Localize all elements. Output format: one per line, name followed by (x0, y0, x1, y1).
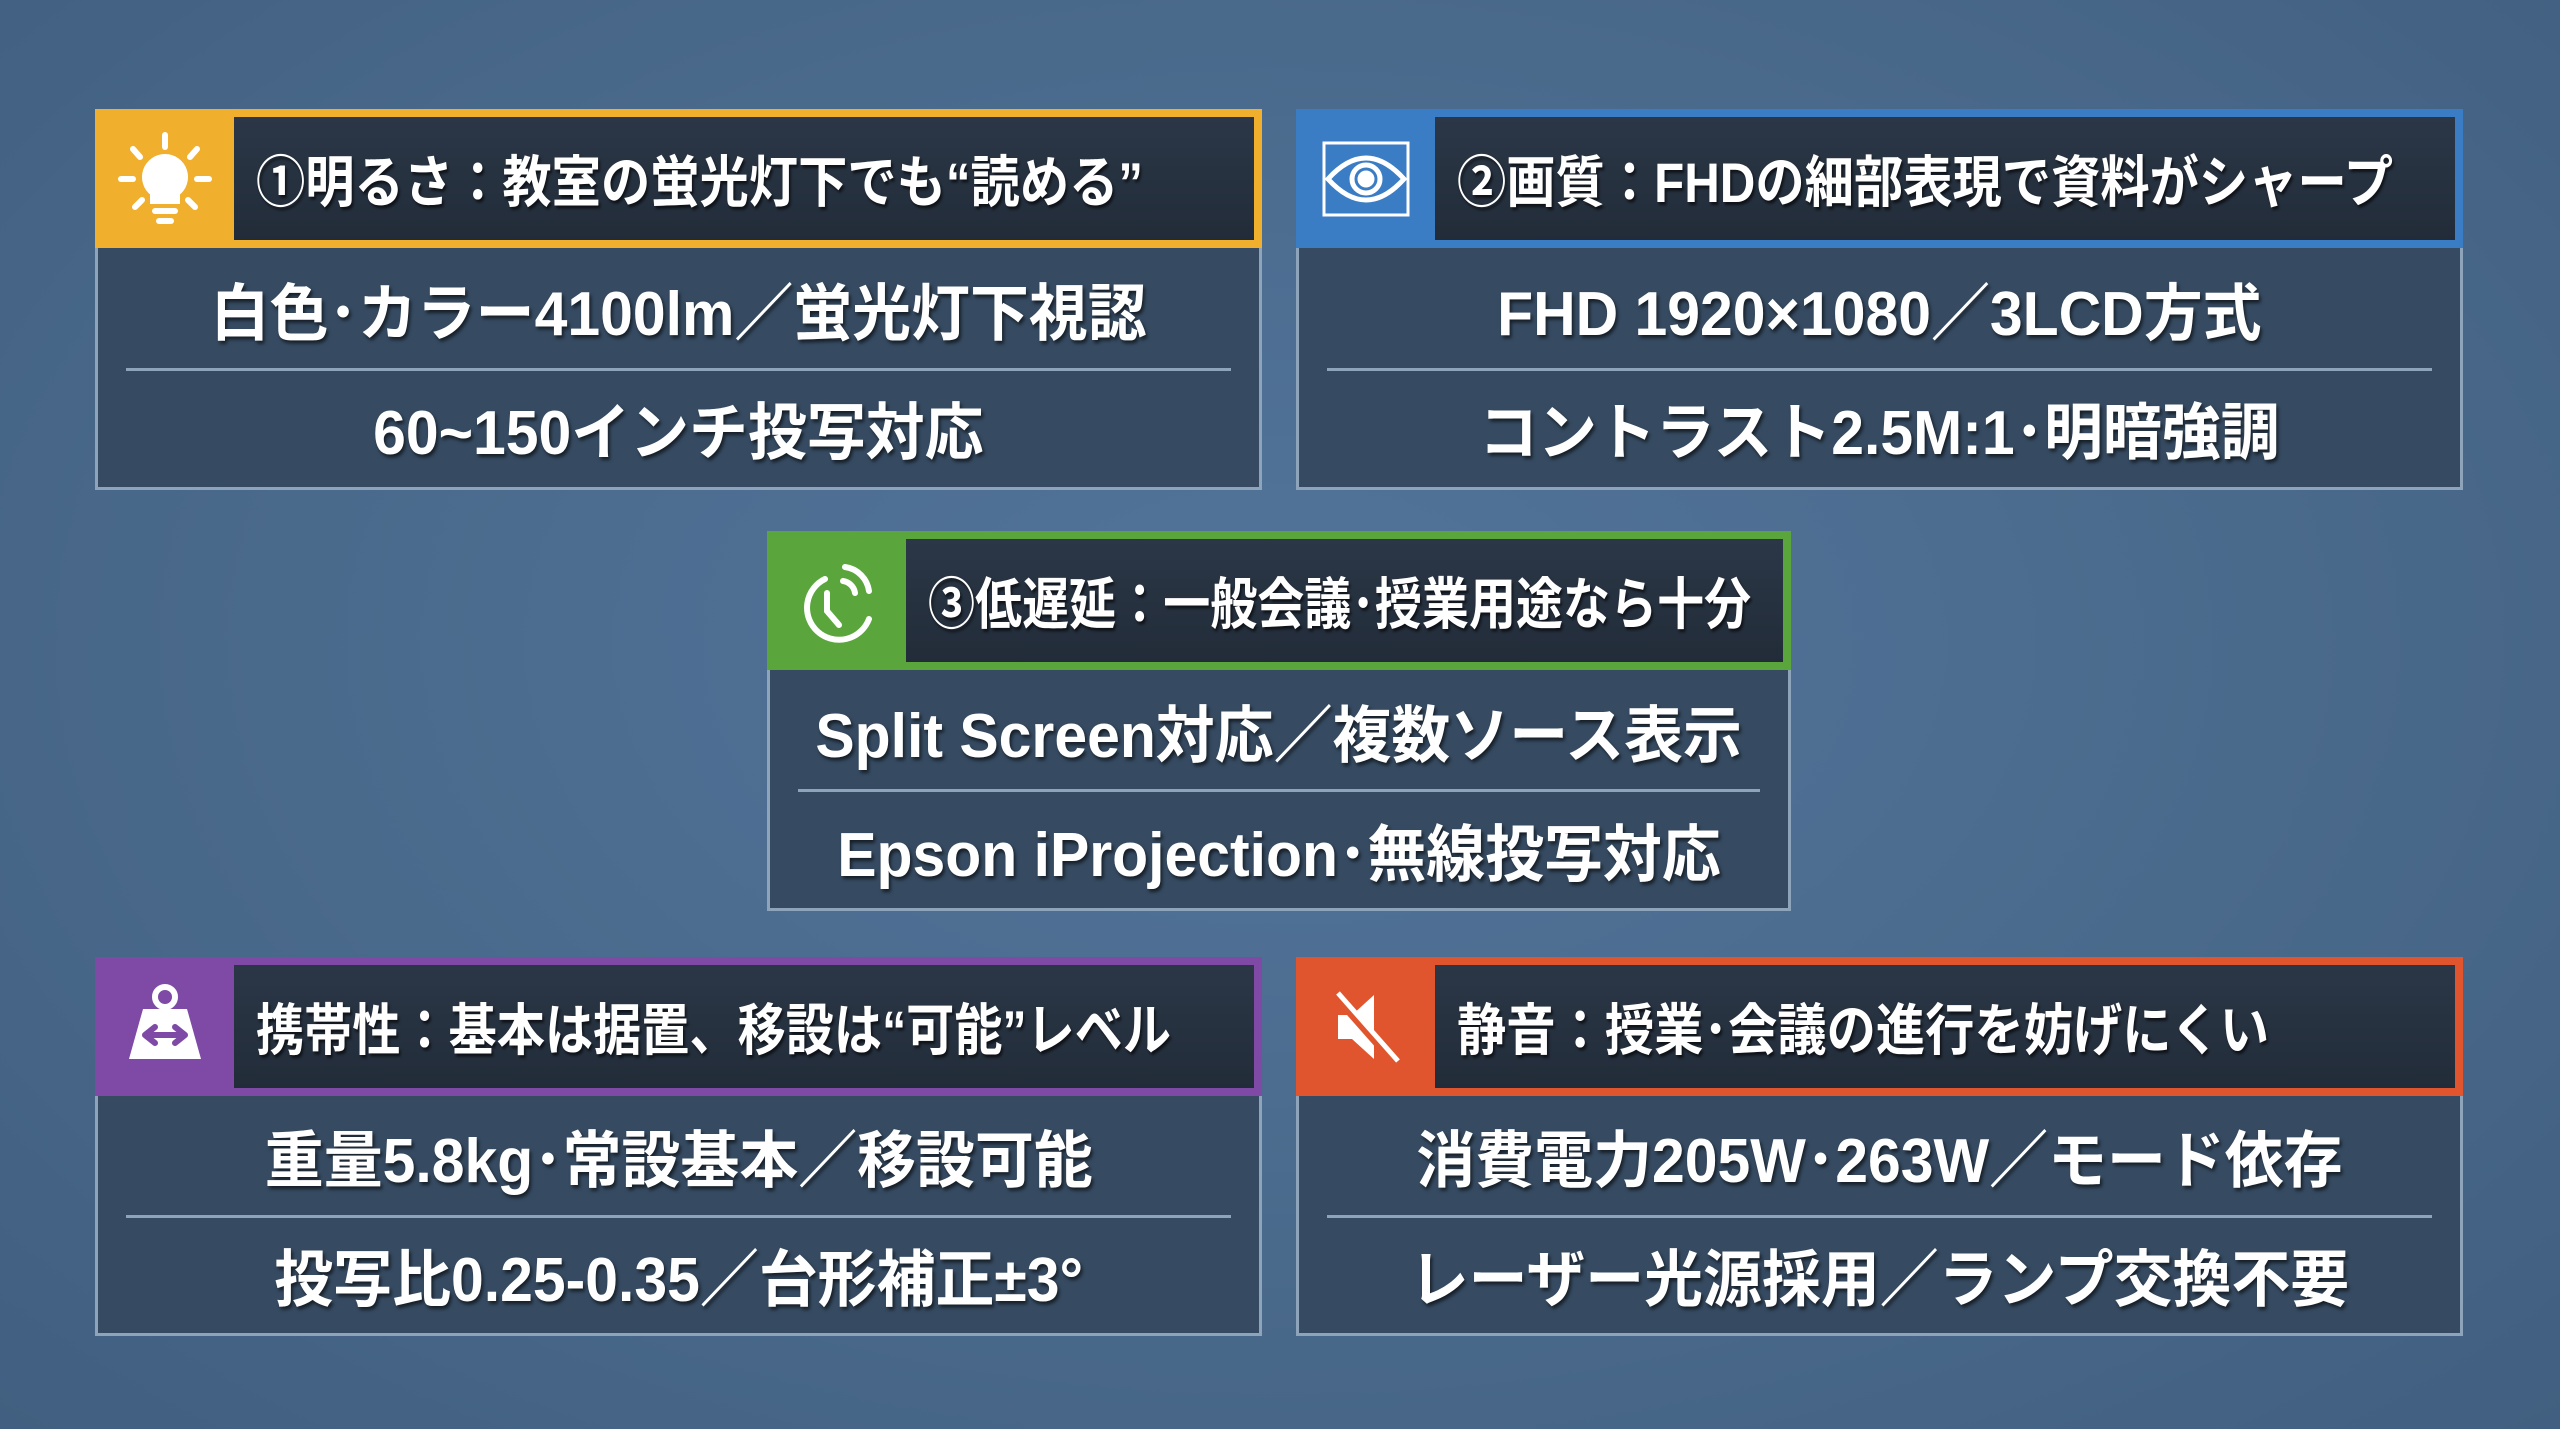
header: portability (95, 957, 1262, 1096)
icon: light bulb (118, 132, 212, 224)
heading text: ①明るさ：教室の蛍光灯下でも“読める” (256, 151, 1143, 214)
heading text: ③低遅延：一般会議･授業用途なら十分 (928, 573, 1751, 636)
heading text: 携帯性：基本は据置、移設は“可能”レベル (256, 999, 1171, 1062)
heading text (234, 965, 1254, 1088)
heading text (234, 117, 1254, 240)
header: silence (1296, 957, 2463, 1096)
body rows: 投写比0.25-0.35／台形補正±3° (274, 1246, 1083, 1315)
body rows (1296, 248, 2463, 490)
icon: clock with signal (804, 564, 872, 643)
panel: silence (1296, 957, 2463, 1336)
body rows (1296, 1096, 2463, 1336)
heading text (1435, 965, 2455, 1088)
body rows: Split Screen対応／複数ソース表示 (816, 702, 1742, 770)
body rows (767, 670, 1791, 911)
body rows: 重量5.8kg･常設基本／移設可能 (265, 1127, 1092, 1196)
heading text (906, 539, 1783, 662)
icon: eye (1322, 142, 1410, 216)
body rows: FHD 1920×1080／3LCD方式 (1497, 280, 2262, 349)
heading text (1435, 117, 2455, 240)
panel: image quality (1296, 109, 2463, 490)
heading text: 静音：授業･会議の進行を妨げにくい (1457, 999, 2269, 1062)
panel: low latency (767, 531, 1791, 911)
icon: weight (129, 984, 201, 1059)
body rows: 消費電力205W･263W／モード依存 (1416, 1127, 2343, 1196)
icon: muted speaker (1336, 991, 1400, 1063)
body rows (95, 1096, 1262, 1336)
header: brightness (95, 109, 1262, 248)
body rows: 白色･カラー4100lm／蛍光灯下視認 (210, 280, 1147, 349)
body rows: レーザー光源採用／ランプ交換不要 (1410, 1246, 2349, 1315)
heading text: ②画質：FHDの細部表現で資料がシャープ (1457, 151, 2393, 214)
header: low latency (767, 531, 1791, 670)
body rows: 60~150インチ投写対応 (373, 399, 984, 468)
body rows: Epson iProjection･無線投写対応 (837, 820, 1721, 890)
body rows (95, 248, 1262, 490)
panel: portability (95, 957, 1262, 1336)
body rows: コントラスト2.5M:1･明暗強調 (1479, 399, 2280, 468)
panel: brightness (95, 109, 1262, 490)
header: image quality (1296, 109, 2463, 248)
